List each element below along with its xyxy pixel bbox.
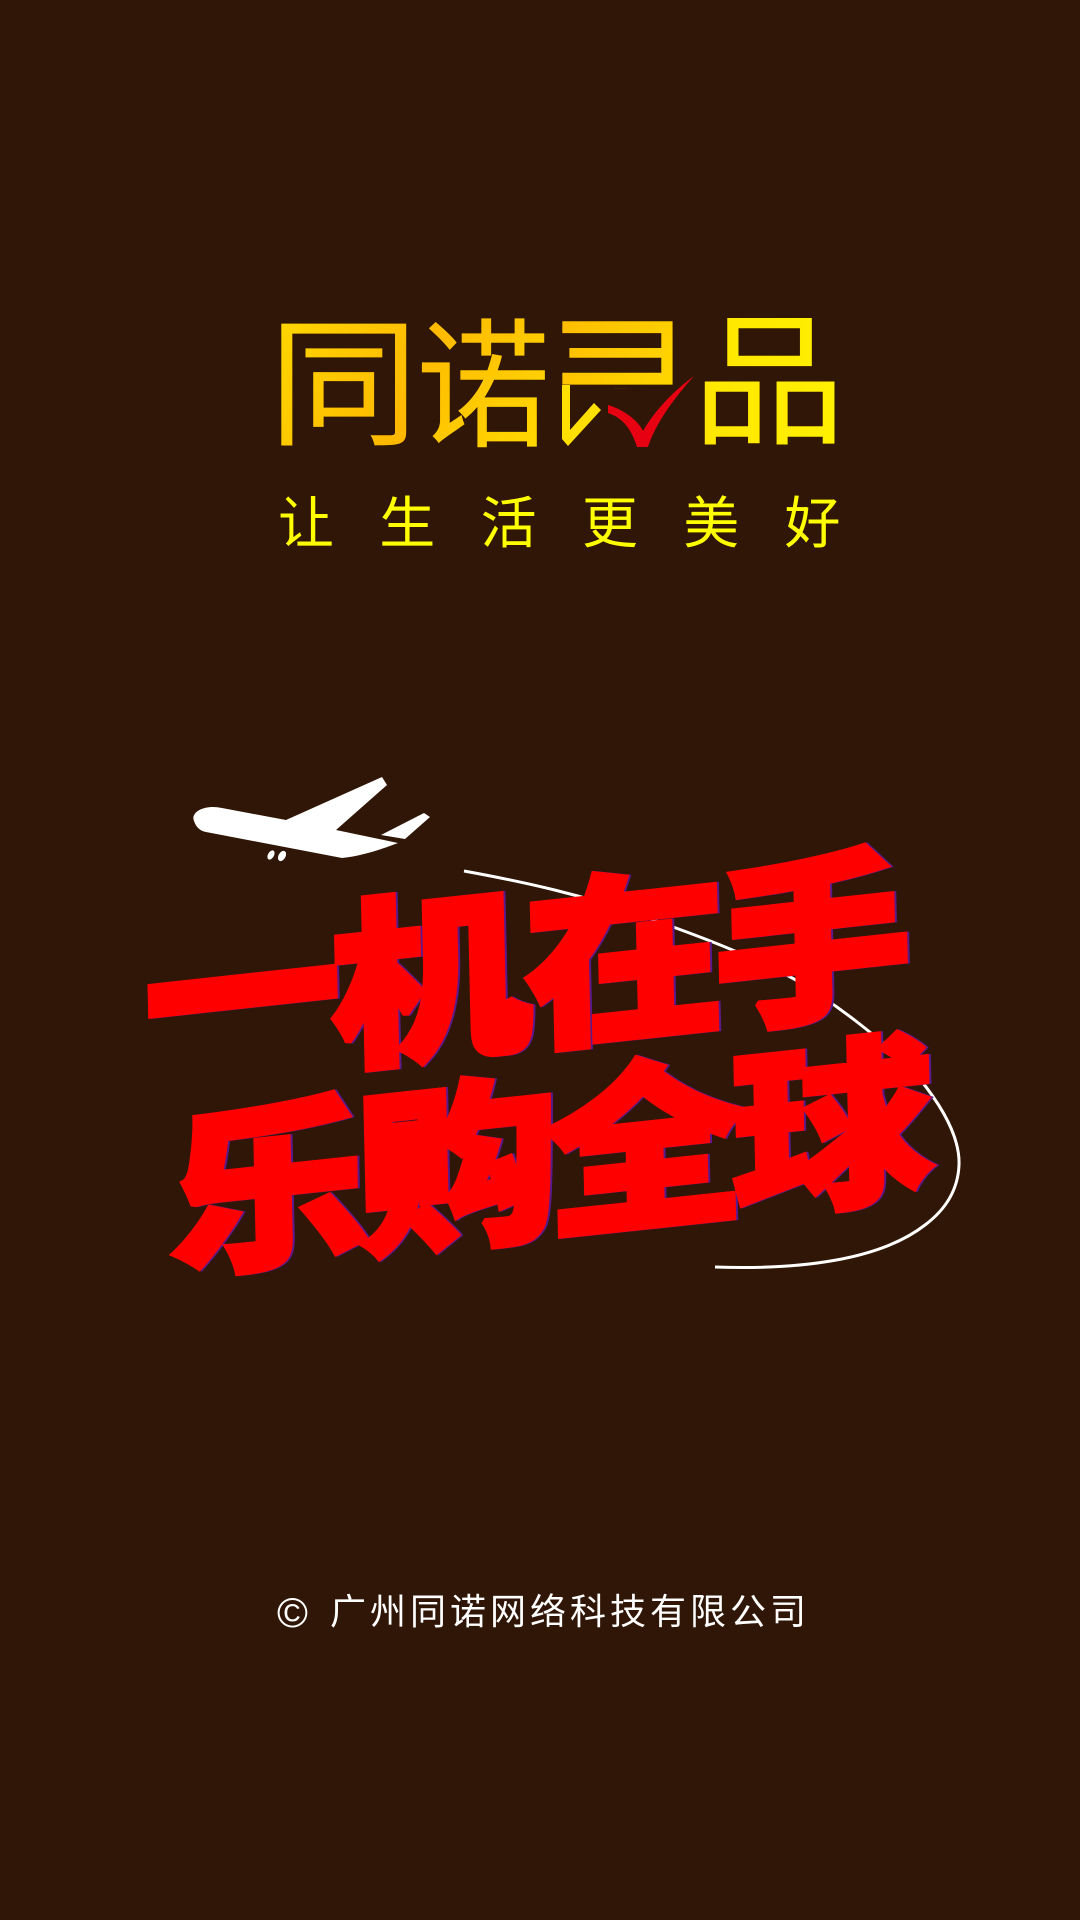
copyright footer — [277, 1589, 810, 1636]
logo character 灵: 灵 — [541, 304, 698, 498]
logo character 品: 品 — [692, 303, 846, 464]
logo swoosh stroke under 灵 — [562, 385, 601, 446]
slogan character 乐: 乐 — [165, 1034, 371, 1316]
logo character 诺: 诺 — [416, 311, 550, 467]
logo character 同: 同 — [268, 307, 419, 464]
slogan character 手: 手 — [711, 788, 913, 1069]
slogan character 全: 全 — [541, 994, 747, 1276]
company name: 广州同诺网络科技有限公司 — [330, 1591, 810, 1632]
slogan character 一: 一 — [141, 843, 343, 1124]
slogan character 在: 在 — [521, 806, 727, 1088]
slogan: 一机在手 乐购全球 — [141, 788, 935, 1316]
tagline: 让生活更美好 — [278, 492, 886, 555]
slogan character 购: 购 — [354, 1014, 560, 1296]
logo: 同诺灵品 with red check — [281, 318, 834, 448]
slogan character 球: 球 — [729, 974, 935, 1256]
icon: red check mark — [608, 376, 694, 447]
slogan character 机: 机 — [327, 826, 533, 1108]
copyright symbol: © — [277, 1589, 308, 1636]
flight path swoosh — [464, 871, 959, 1268]
icon: airplane — [193, 777, 430, 863]
